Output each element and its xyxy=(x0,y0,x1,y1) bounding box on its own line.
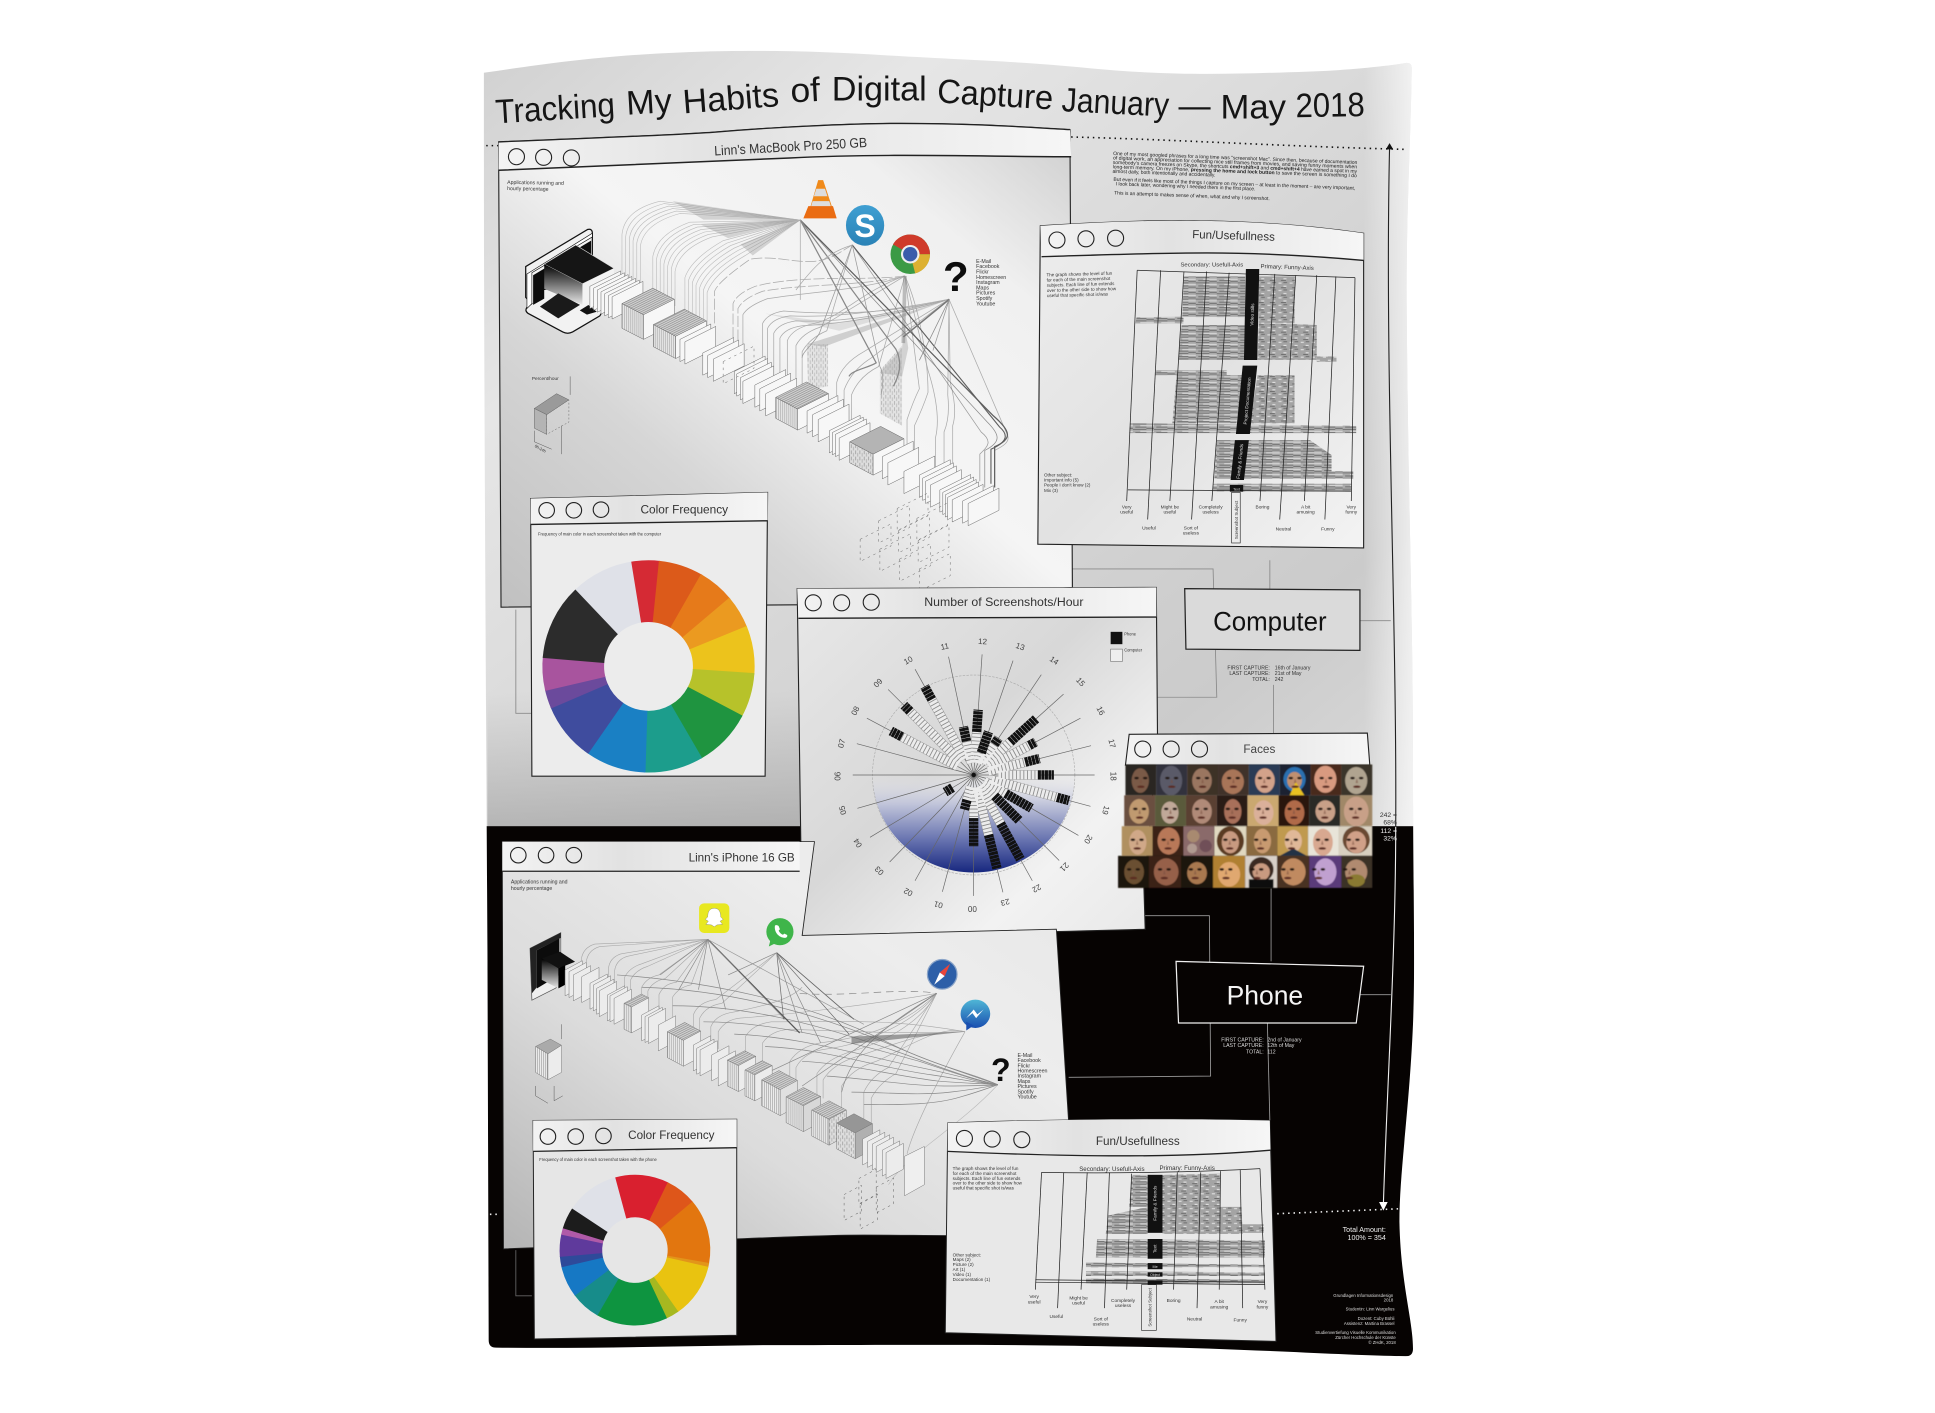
legend: percent per hour: 0h-24h xyxy=(534,443,547,454)
hour labels: 10 xyxy=(902,654,915,667)
hour labels: 21 xyxy=(1058,861,1071,874)
application list: Homescreen xyxy=(1017,1069,1048,1075)
application list: E-Mail xyxy=(976,259,991,265)
Phone box: Phone xyxy=(1227,980,1303,1011)
credits xyxy=(1315,1293,1396,1345)
panel: Linn's iPhone xyxy=(502,842,1069,1249)
axis labels: Neutral xyxy=(1187,1316,1202,1322)
isometric stacks by hour xyxy=(590,271,999,526)
chart: fun and usefulness bands: Me xyxy=(1153,1265,1158,1269)
credits: 2018 xyxy=(1384,1297,1394,1302)
other subject note: Other subject: xyxy=(1044,472,1072,477)
chart: fun and usefulness bands: Project Documentation xyxy=(1243,377,1252,425)
computer capture stats: TOTAL: xyxy=(1252,677,1270,683)
phone capture stats: FIRST CAPTURE: xyxy=(1221,1038,1264,1044)
description: for each of the main screenshot xyxy=(1047,276,1111,283)
application list: Instagram xyxy=(976,280,1000,286)
intro text: One of my most googled phrases for a long time was "screenshot Mac". Since then, because of documentation xyxy=(1113,151,1358,166)
hour labels: 14 xyxy=(1048,654,1061,667)
Computer box xyxy=(1185,589,1360,650)
axis labels: amusing xyxy=(1210,1304,1229,1310)
caption: Applications running and xyxy=(511,880,568,886)
percent computer xyxy=(1380,812,1397,826)
dotted divider bottom xyxy=(490,1209,1399,1214)
phone capture stats: TOTAL: xyxy=(1246,1049,1264,1055)
Phone box xyxy=(1176,961,1364,1023)
icon: Messenger xyxy=(961,1000,990,1030)
hour labels: 04 xyxy=(852,836,864,849)
intro text: I look back later, wondering why I needed them in the first place. xyxy=(1116,181,1256,192)
computer capture stats: 21st of May xyxy=(1275,671,1302,677)
application list: Facebook xyxy=(976,264,1000,270)
description: The graph shows the level of fun xyxy=(1046,271,1113,277)
vertical total line and arrow xyxy=(1379,143,1396,1211)
axis labels: Neutral xyxy=(1276,527,1291,533)
legend: percent per hour xyxy=(536,1024,563,1103)
hour labels: 07 xyxy=(836,738,847,749)
other subject note: People I don't know (2) xyxy=(1044,483,1091,488)
hour labels: 17 xyxy=(1106,738,1117,749)
panel title: Color Frequency xyxy=(628,1128,715,1142)
intro text: But even if it feels like most of the things I capture on my screen – at least in the moment – are very important, xyxy=(1113,177,1355,192)
panel: Color Frequency computer xyxy=(531,492,768,776)
window buttons xyxy=(508,149,579,166)
axis titles: Secondary: Usefull-Axis xyxy=(1180,263,1243,269)
caption: hourly percentage xyxy=(511,886,552,892)
axis labels xyxy=(1028,1294,1269,1328)
icon: WhatsApp xyxy=(766,918,793,947)
axis labels: Very xyxy=(1258,1300,1267,1305)
description: subjects. Each line of fun extends xyxy=(1047,281,1115,288)
panel: Fun/Usefullness computer xyxy=(1038,221,1364,548)
isometric stacks by hour xyxy=(565,961,924,1196)
credits: © ZHdK, 2018 xyxy=(1368,1340,1396,1345)
axis labels: useless xyxy=(1183,531,1200,537)
panel: Faces xyxy=(1118,733,1372,888)
panel: Fun/Usefullness phone xyxy=(945,1119,1276,1341)
percent computer: 242 = xyxy=(1380,812,1397,819)
axis labels: Boring xyxy=(1167,1298,1181,1304)
flow lines to applications xyxy=(581,939,998,1185)
caption: Frequency of main color in each screenshot taken with the phone xyxy=(539,1157,657,1162)
hour labels: 00 xyxy=(967,904,977,913)
icon: question mark: ? xyxy=(943,253,969,300)
textured flow blocks xyxy=(765,299,949,426)
intro text: almost daily, both intentionally and accidentally. xyxy=(1112,169,1216,179)
icon: Snapchat xyxy=(699,903,729,933)
panel: Color Frequency phone xyxy=(533,1119,737,1339)
hour labels: 22 xyxy=(1030,882,1043,895)
legend: Computer xyxy=(1124,648,1143,653)
icon: Skype xyxy=(846,205,884,246)
computer capture stats: 16th of January xyxy=(1275,665,1311,671)
title: Capture xyxy=(936,72,1054,117)
axis labels: useless xyxy=(1115,1303,1132,1309)
computer capture stats: FIRST CAPTURE: xyxy=(1227,665,1270,671)
panel title: Fun/Usefullness xyxy=(1096,1134,1180,1148)
axis titles xyxy=(1180,263,1314,272)
other subject note: Video (1) xyxy=(953,1272,972,1277)
caption: hourly percentage xyxy=(507,186,549,193)
Computer box: Computer xyxy=(1213,606,1327,637)
dotted divider top xyxy=(486,137,1404,149)
hour labels: 09 xyxy=(872,676,885,689)
axis labels: useful xyxy=(1163,510,1176,516)
axis labels xyxy=(1120,504,1358,537)
window buttons xyxy=(511,847,582,863)
intro text xyxy=(1112,151,1358,205)
total amount: 100% = 354 xyxy=(1348,1234,1386,1242)
computer capture stats: LAST CAPTURE: xyxy=(1229,671,1270,677)
title: Habits xyxy=(681,76,780,122)
chart: fun and usefulness bands xyxy=(1035,1169,1265,1330)
chart: fun and usefulness bands: Screenshot Subject xyxy=(1147,1287,1152,1327)
application list: Pictures xyxy=(976,291,996,297)
hour labels: 01 xyxy=(932,899,944,910)
percent phone xyxy=(1380,828,1397,842)
axis labels: Very xyxy=(1346,505,1356,510)
panel title: Faces xyxy=(1243,743,1275,756)
axis labels: A bit xyxy=(1215,1300,1224,1305)
donut chart: computer colours xyxy=(542,560,755,773)
application list: Pictures xyxy=(1017,1084,1037,1090)
donut chart: phone colours xyxy=(559,1174,711,1326)
other subject note: Important info (5) xyxy=(1044,478,1079,483)
description: useful that specific shot is/was xyxy=(953,1186,1015,1191)
percent phone: 32% xyxy=(1383,835,1397,842)
axis labels: Boring xyxy=(1256,504,1270,510)
hour labels: 16 xyxy=(1094,705,1107,717)
percent phone: 112 = xyxy=(1380,828,1397,835)
flow lines to applications xyxy=(622,201,800,331)
chart: fun and usefulness bands: Family & Friends xyxy=(1236,443,1244,479)
legend xyxy=(1111,632,1143,661)
panel title: Number of Screenshots/Hour xyxy=(924,595,1084,609)
legend: percent per hour: Percent/hour xyxy=(532,376,559,381)
hour labels: 12 xyxy=(978,637,988,647)
face photo grid xyxy=(1118,765,1372,888)
hour labels: 05 xyxy=(837,804,848,816)
hour labels: 13 xyxy=(1014,641,1026,653)
application list: Youtube xyxy=(976,301,995,307)
legend: Phone xyxy=(1124,632,1137,637)
phone capture stats: 112 xyxy=(1267,1049,1276,1055)
axis labels: Might be xyxy=(1161,505,1179,510)
panel title: Linn's MacBook Pro 250 GB xyxy=(714,135,867,158)
hour labels: 11 xyxy=(940,641,950,652)
application list: Flickr xyxy=(1017,1063,1030,1069)
axis labels: amusing xyxy=(1297,510,1315,516)
title: 2018 xyxy=(1295,86,1365,125)
hour labels: 23 xyxy=(999,897,1011,908)
total amount xyxy=(1343,1226,1386,1242)
icon: Skype: S xyxy=(854,208,876,244)
axis labels: useful xyxy=(1120,510,1133,516)
credits: Dozent: Cuby Bühli xyxy=(1358,1316,1395,1321)
caption: Applications running and xyxy=(507,180,564,187)
other subject note: Other subject: xyxy=(953,1252,981,1257)
axis labels: funny xyxy=(1257,1304,1269,1310)
phone capture stats: 2nd of January xyxy=(1267,1038,1302,1044)
panel title: Fun/Usefullness xyxy=(1192,228,1275,244)
window buttons xyxy=(539,502,609,518)
total amount: Total Amount: xyxy=(1343,1226,1386,1234)
axis labels: useless xyxy=(1202,510,1219,516)
chart: fun and usefulness bands: Family & Friends xyxy=(1152,1185,1157,1221)
title xyxy=(494,71,1365,131)
application list: Maps xyxy=(1017,1079,1031,1085)
axis titles xyxy=(1079,1165,1215,1173)
credits: Studienvertiefung Visuelle Kommunikation xyxy=(1315,1330,1396,1335)
hour labels: 08 xyxy=(849,704,862,717)
dashed empty hours xyxy=(723,346,950,591)
window buttons xyxy=(540,1128,611,1144)
intro text: somebody's camera freezes on Skype, the shortcuts cmd+shift+3 and cmd+shift+4 have earned a spot in my xyxy=(1113,160,1358,175)
axis labels: Funny xyxy=(1234,1318,1247,1324)
application list: Maps xyxy=(976,285,989,291)
title: — xyxy=(1179,87,1211,125)
axis labels: Useful xyxy=(1142,525,1156,531)
hour labels: 20 xyxy=(1082,833,1094,846)
legend: percent per hour xyxy=(532,376,570,454)
chart: fun and usefulness bands: Screenshot Subject xyxy=(1234,500,1239,539)
axis titles: Primary: Funny-Axis xyxy=(1260,264,1314,272)
axis labels: Sort of xyxy=(1094,1317,1108,1322)
other subject note: Maps (2) xyxy=(953,1257,971,1262)
credits: Assistenz: Martina Brassel xyxy=(1344,1321,1395,1326)
axis labels: Completely xyxy=(1199,505,1223,510)
computer capture stats xyxy=(1227,665,1311,683)
chart: fun and usefulness bands xyxy=(1127,269,1356,543)
application list: Youtube xyxy=(1017,1094,1037,1100)
hour labels: 15 xyxy=(1074,676,1087,689)
axis labels: Funny xyxy=(1321,527,1335,533)
axis labels: Very xyxy=(1029,1295,1039,1300)
title: Digital xyxy=(832,71,927,109)
polar chart xyxy=(853,654,1095,896)
title: My xyxy=(625,82,673,123)
caption: Frequency of main color in each screenshot taken with the computer xyxy=(538,532,662,537)
application list: Instagram xyxy=(1017,1074,1042,1080)
credits: Zürcher Hochschule der Künste xyxy=(1335,1335,1396,1340)
credits: Studentin: Linn Wargelius xyxy=(1346,1307,1394,1312)
intro text: of digital work, an appreciation for collecting nice still frames from movies, and saving funny moments when xyxy=(1113,155,1358,170)
other subject note: Documentation (1) xyxy=(953,1277,991,1282)
chart: fun and usefulness bands: Object xyxy=(1150,1273,1160,1277)
window buttons xyxy=(1049,230,1124,248)
phone capture stats: 12th of May xyxy=(1267,1043,1295,1049)
icon: Chrome xyxy=(890,234,930,274)
description: subjects. Each line of fun extends xyxy=(953,1176,1021,1181)
phone capture stats xyxy=(1221,1038,1302,1055)
intro text: long-term memory. On my iPhone, pressing the home and lock button to save the screen is something I do xyxy=(1113,164,1357,179)
axis labels: useful xyxy=(1028,1299,1041,1305)
intro text: This is an attempt to makes sense of when, what and why I screenshot. xyxy=(1114,190,1270,202)
title: of xyxy=(789,71,822,110)
panel: Linn's MacBook Pro xyxy=(499,123,1072,607)
other subject note: Picture (2) xyxy=(953,1262,974,1267)
connector lines on grey area xyxy=(516,560,1391,734)
percent computer: 68% xyxy=(1383,819,1397,826)
description: over to the other side to show how xyxy=(1047,286,1117,293)
computer capture stats: 242 xyxy=(1275,677,1284,683)
axis labels: Might be xyxy=(1069,1296,1088,1301)
description: over to the other side to show how xyxy=(953,1181,1023,1186)
axis titles: Secondary: Usefull-Axis xyxy=(1079,1166,1145,1173)
hour labels: 03 xyxy=(873,864,886,877)
window buttons xyxy=(956,1130,1030,1148)
chart: fun and usefulness bands: Video stills xyxy=(1249,303,1255,326)
title: January xyxy=(1061,81,1170,125)
credits: Grundlagen Informationsdesign xyxy=(1333,1293,1394,1298)
phone capture stats: LAST CAPTURE: xyxy=(1223,1043,1264,1049)
title: May xyxy=(1220,88,1286,126)
axis labels: Very xyxy=(1122,505,1131,510)
axis labels: funny xyxy=(1345,510,1358,516)
hour labels: 06 xyxy=(833,771,842,781)
axis labels: Completely xyxy=(1111,1299,1135,1304)
other subject note: Art (1) xyxy=(953,1267,966,1272)
isometric laptop icon xyxy=(526,229,614,333)
connector lines on black area xyxy=(516,889,1391,1296)
panel title: Color Frequency xyxy=(640,502,729,516)
application list: Homescreen xyxy=(976,275,1006,281)
chart: fun and usefulness bands: Text xyxy=(1152,1244,1157,1253)
icon: question mark: ? xyxy=(991,1052,1011,1088)
hour labels xyxy=(833,637,1118,913)
icon: VLC cone xyxy=(803,180,837,218)
description: The graph shows the level of fun xyxy=(953,1166,1019,1171)
application list: Spotify xyxy=(976,296,993,302)
icon: Safari xyxy=(927,959,957,989)
description: for each of the main screenshot xyxy=(953,1171,1017,1176)
axis labels: useful xyxy=(1072,1301,1085,1307)
panel title: Linn's iPhone 16 GB xyxy=(689,850,795,864)
application list: E-Mail xyxy=(1017,1053,1032,1059)
hour labels: 19 xyxy=(1100,805,1111,816)
title: Tracking xyxy=(494,86,616,131)
description: useful that specific shot is/was xyxy=(1047,292,1109,298)
axis labels: useless xyxy=(1093,1322,1110,1328)
axis labels: Sort of xyxy=(1184,526,1198,531)
chart: fun and usefulness bands: Text xyxy=(1233,488,1240,492)
other subject note: Mix (3) xyxy=(1044,488,1058,493)
panel: Number of Screenshots/Hour xyxy=(797,587,1158,937)
axis titles: Primary: Funny-Axis xyxy=(1159,1165,1215,1172)
dashed empty hours xyxy=(844,1169,893,1229)
poster: wavy silver and black sheet xyxy=(484,51,1414,1356)
isometric phone icon xyxy=(530,933,575,1000)
application list: Facebook xyxy=(1017,1058,1041,1064)
window buttons xyxy=(805,594,879,611)
hour labels: 02 xyxy=(902,886,914,898)
window buttons xyxy=(1135,741,1208,757)
application list: Flickr xyxy=(976,269,989,275)
application list: Spotify xyxy=(1017,1089,1034,1095)
axis labels: Useful xyxy=(1050,1314,1063,1320)
axis labels: A bit xyxy=(1301,505,1310,510)
poster sheet xyxy=(469,37,1432,1369)
hour labels: 18 xyxy=(1109,772,1118,781)
